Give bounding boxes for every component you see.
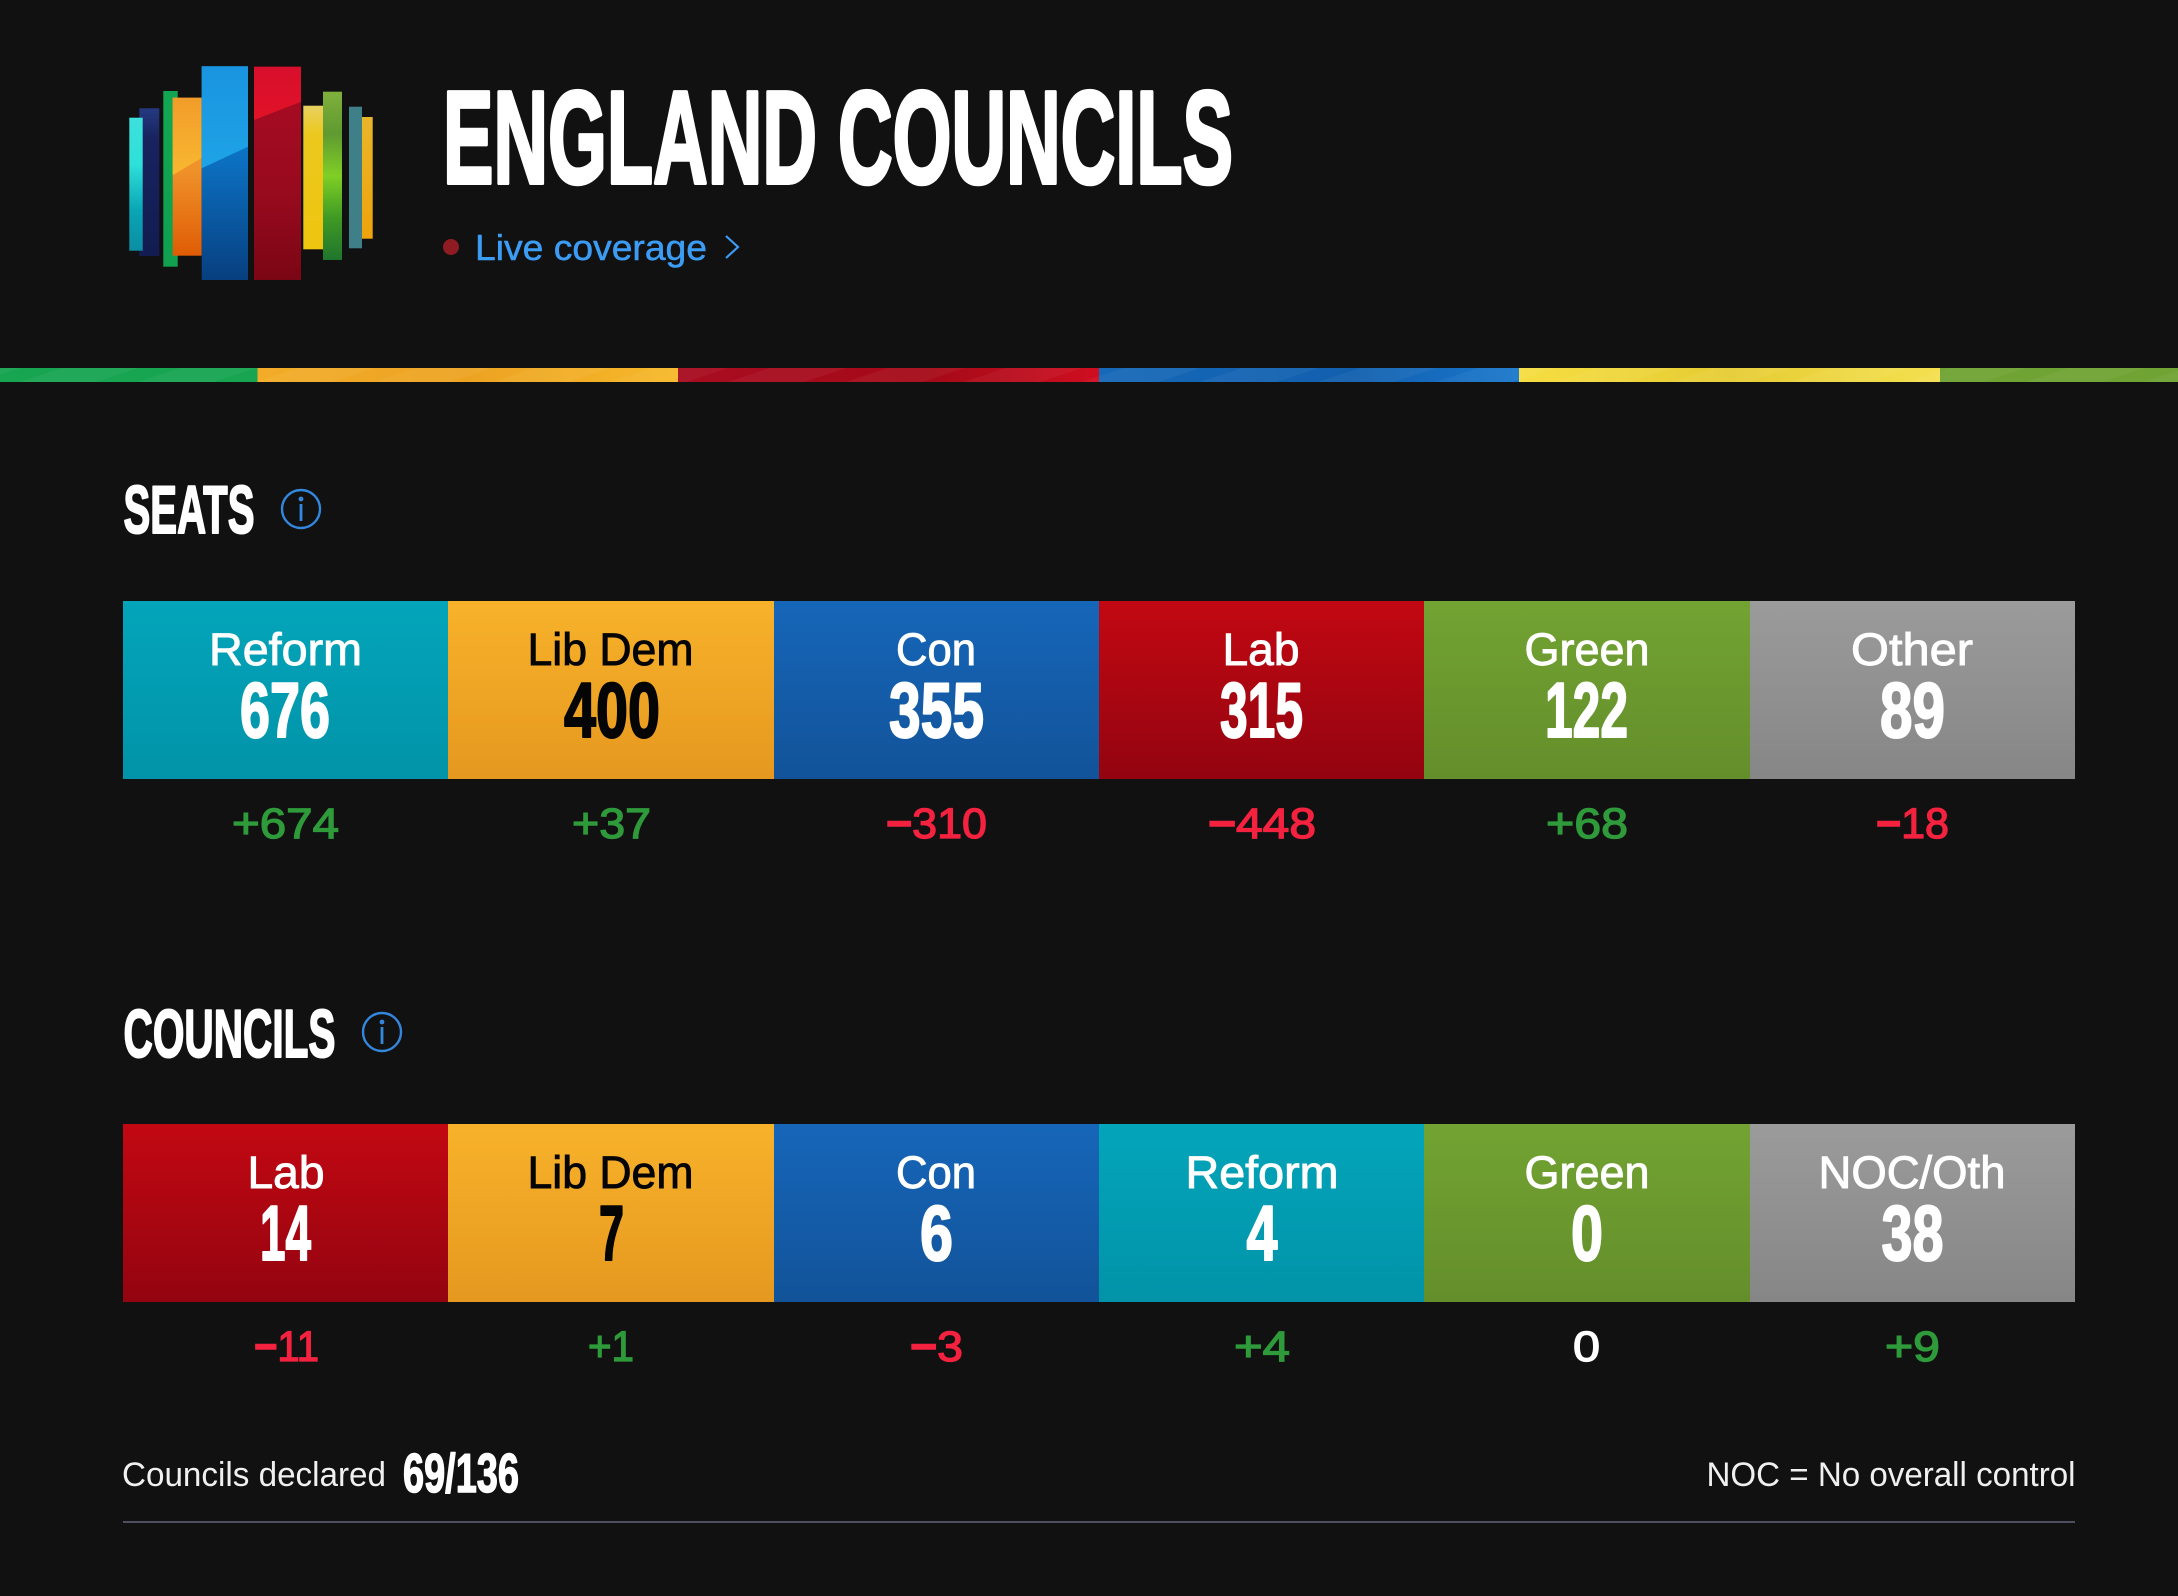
seats changes row: −448 bbox=[1208, 800, 1316, 848]
councils bar: Lab bbox=[123, 1124, 448, 1302]
seats bar: Green bbox=[1424, 601, 1750, 779]
seats bar: Reform: Reform bbox=[209, 624, 362, 675]
seats bar: Lib Dem: 400 bbox=[564, 666, 660, 754]
footer rule bbox=[123, 1521, 2075, 1523]
councils bar: Reform: 4 bbox=[1246, 1189, 1278, 1277]
councils bar: Con: 6 bbox=[920, 1189, 953, 1277]
councils changes row: −11 bbox=[254, 1323, 319, 1371]
icon: seats info bbox=[282, 490, 320, 528]
seats bar: Green: Green bbox=[1524, 624, 1650, 675]
councils changes row: +1 bbox=[588, 1323, 634, 1371]
councils bar: Green: 0 bbox=[1571, 1189, 1603, 1277]
councils bar: Green: Green bbox=[1524, 1147, 1650, 1198]
councils bar: NOC/Oth bbox=[1750, 1124, 2075, 1302]
councils bar: Lib Dem: 7 bbox=[599, 1189, 624, 1277]
seats bar: Con: 355 bbox=[889, 666, 984, 754]
councils bar: Green bbox=[1424, 1124, 1750, 1302]
councils changes row: 0 bbox=[1573, 1323, 1600, 1371]
seats bar: Lab: Lab bbox=[1222, 624, 1300, 675]
councils bar: Lib Dem: Lib Dem bbox=[528, 1147, 694, 1198]
title: ENGLAND COUNCILS bbox=[443, 64, 1233, 211]
councils bar: Lab: 14 bbox=[260, 1189, 311, 1277]
seats bar: Lib Dem: Lib Dem bbox=[528, 624, 694, 675]
seats bar: Other: 89 bbox=[1880, 666, 1945, 754]
seats bar: Lab: 315 bbox=[1220, 666, 1303, 754]
councils bar: Con bbox=[774, 1124, 1099, 1302]
councils bar: Reform bbox=[1099, 1124, 1424, 1302]
seats changes row: −18 bbox=[1876, 800, 1949, 848]
footer: councils declared bbox=[122, 1442, 519, 1504]
seats bar: Green: 122 bbox=[1545, 666, 1628, 754]
seats bar: Lab bbox=[1099, 601, 1424, 779]
councils bar: Lib Dem bbox=[448, 1124, 774, 1302]
colour stripe divider bbox=[0, 368, 2178, 382]
live coverage link: Live coverage bbox=[475, 227, 707, 268]
seats bar: Con bbox=[774, 601, 1099, 779]
seats changes row: +674 bbox=[232, 800, 339, 848]
heading: councils: COUNCILS bbox=[124, 996, 336, 1072]
councils changes row: +9 bbox=[1885, 1323, 1940, 1371]
councils bar: Lab: Lab bbox=[248, 1147, 324, 1198]
seats bar: Lib Dem bbox=[448, 601, 774, 779]
councils bar: NOC/Oth: NOC/Oth bbox=[1818, 1147, 2006, 1198]
footer: councils declared: 69/136 bbox=[403, 1442, 519, 1504]
seats bar: Other bbox=[1750, 601, 2075, 779]
footer: councils declared: Councils declared bbox=[122, 1456, 386, 1494]
seats bar: Reform: 676 bbox=[240, 666, 330, 754]
section: councils bbox=[123, 996, 2075, 1371]
seats bar: Other: Other bbox=[1851, 624, 1973, 675]
councils changes row: −3 bbox=[910, 1323, 963, 1371]
councils bar: Reform: Reform bbox=[1186, 1147, 1338, 1198]
seats changes row bbox=[232, 800, 1949, 848]
footer: NOC note: NOC = No overall control bbox=[1706, 1456, 2076, 1494]
seats changes row: +68 bbox=[1546, 800, 1628, 848]
councils bar: NOC/Oth: 38 bbox=[1882, 1189, 1944, 1277]
seats changes row: −310 bbox=[886, 800, 987, 848]
councils bar: Con: Con bbox=[896, 1147, 976, 1198]
section: seats bbox=[123, 472, 2075, 848]
seats bar: Reform bbox=[123, 601, 448, 779]
councils changes row: +4 bbox=[1234, 1323, 1290, 1371]
heading: seats: SEATS bbox=[124, 472, 254, 548]
seats changes row: +37 bbox=[572, 800, 651, 848]
councils changes row bbox=[254, 1323, 1940, 1371]
icon: councils info bbox=[363, 1013, 401, 1051]
icon: election logo of coloured bars bbox=[129, 66, 373, 280]
seats bar: Con: Con bbox=[896, 624, 976, 675]
